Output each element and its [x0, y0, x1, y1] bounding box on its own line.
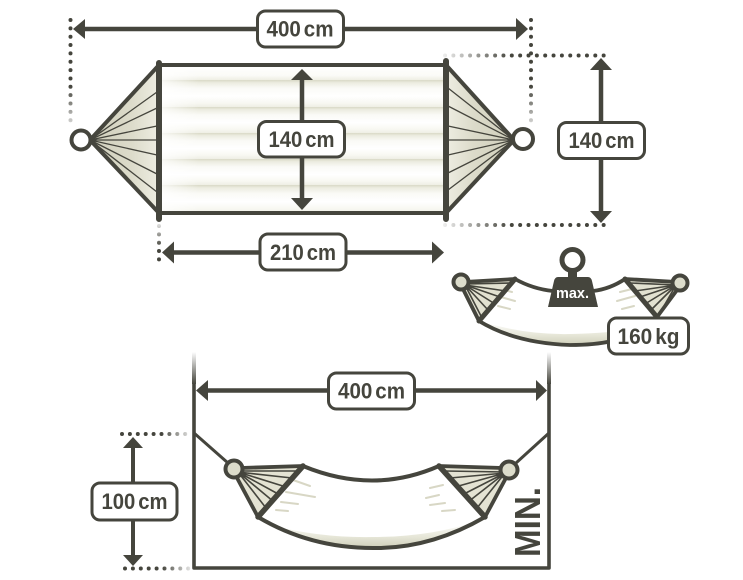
hammock fabric with stripes	[159, 65, 446, 213]
dimension: minimum distance 400 cm: 400 cm	[338, 378, 405, 404]
dimension: minimum distance 400 cm	[196, 373, 547, 409]
dimension: fabric width 140 cm	[258, 69, 344, 210]
hammock outline and bars	[159, 61, 446, 219]
fabric fold marks	[276, 480, 455, 511]
dimension: overall width 140 cm	[558, 58, 644, 223]
dotted guide lines, minimum height	[122, 434, 192, 568]
weight with ring: max.	[556, 285, 589, 302]
load hammock outline	[479, 279, 625, 345]
suspension ropes	[194, 433, 549, 463]
minimum installation frame	[194, 352, 549, 568]
hanging hammock	[194, 433, 549, 548]
load hammock fabric	[479, 279, 657, 345]
hanging hammock left end	[226, 460, 303, 517]
hanging fabric shading crescent	[270, 521, 478, 548]
load fabric fold marks	[497, 289, 635, 309]
top view hammock	[72, 61, 533, 219]
weight with ring	[548, 250, 598, 307]
dotted guide lines, top view	[70, 20, 612, 262]
dimension: overall length 400 cm	[73, 11, 528, 47]
load hammock right end	[625, 276, 688, 317]
maximum load hammock	[454, 250, 688, 354]
dimension: fabric width 140 cm: 140 cm	[268, 127, 334, 152]
MIN. label: MIN.	[507, 487, 548, 557]
dimension: minimum height 100 cm: 100 cm	[102, 489, 168, 514]
hanging hammock fabric	[258, 466, 485, 548]
hanging hammock right end	[439, 462, 518, 517]
load label 160 kg: 160 kg	[618, 324, 680, 349]
load fabric shading crescent	[479, 321, 645, 345]
dimension: overall width 140 cm: 140 cm	[568, 128, 634, 153]
dimension: fabric length 210 cm	[162, 234, 444, 270]
left hammock end with strings	[72, 65, 159, 213]
dimension: fabric length 210 cm: 210 cm	[270, 240, 336, 265]
right hammock end with strings	[446, 65, 533, 213]
load label 160 kg	[608, 318, 688, 354]
load hammock left end	[454, 274, 515, 321]
dimension: overall length 400 cm: 400 cm	[266, 16, 334, 42]
hanging hammock outline	[258, 466, 485, 548]
dimension: minimum height 100 cm	[92, 437, 177, 566]
